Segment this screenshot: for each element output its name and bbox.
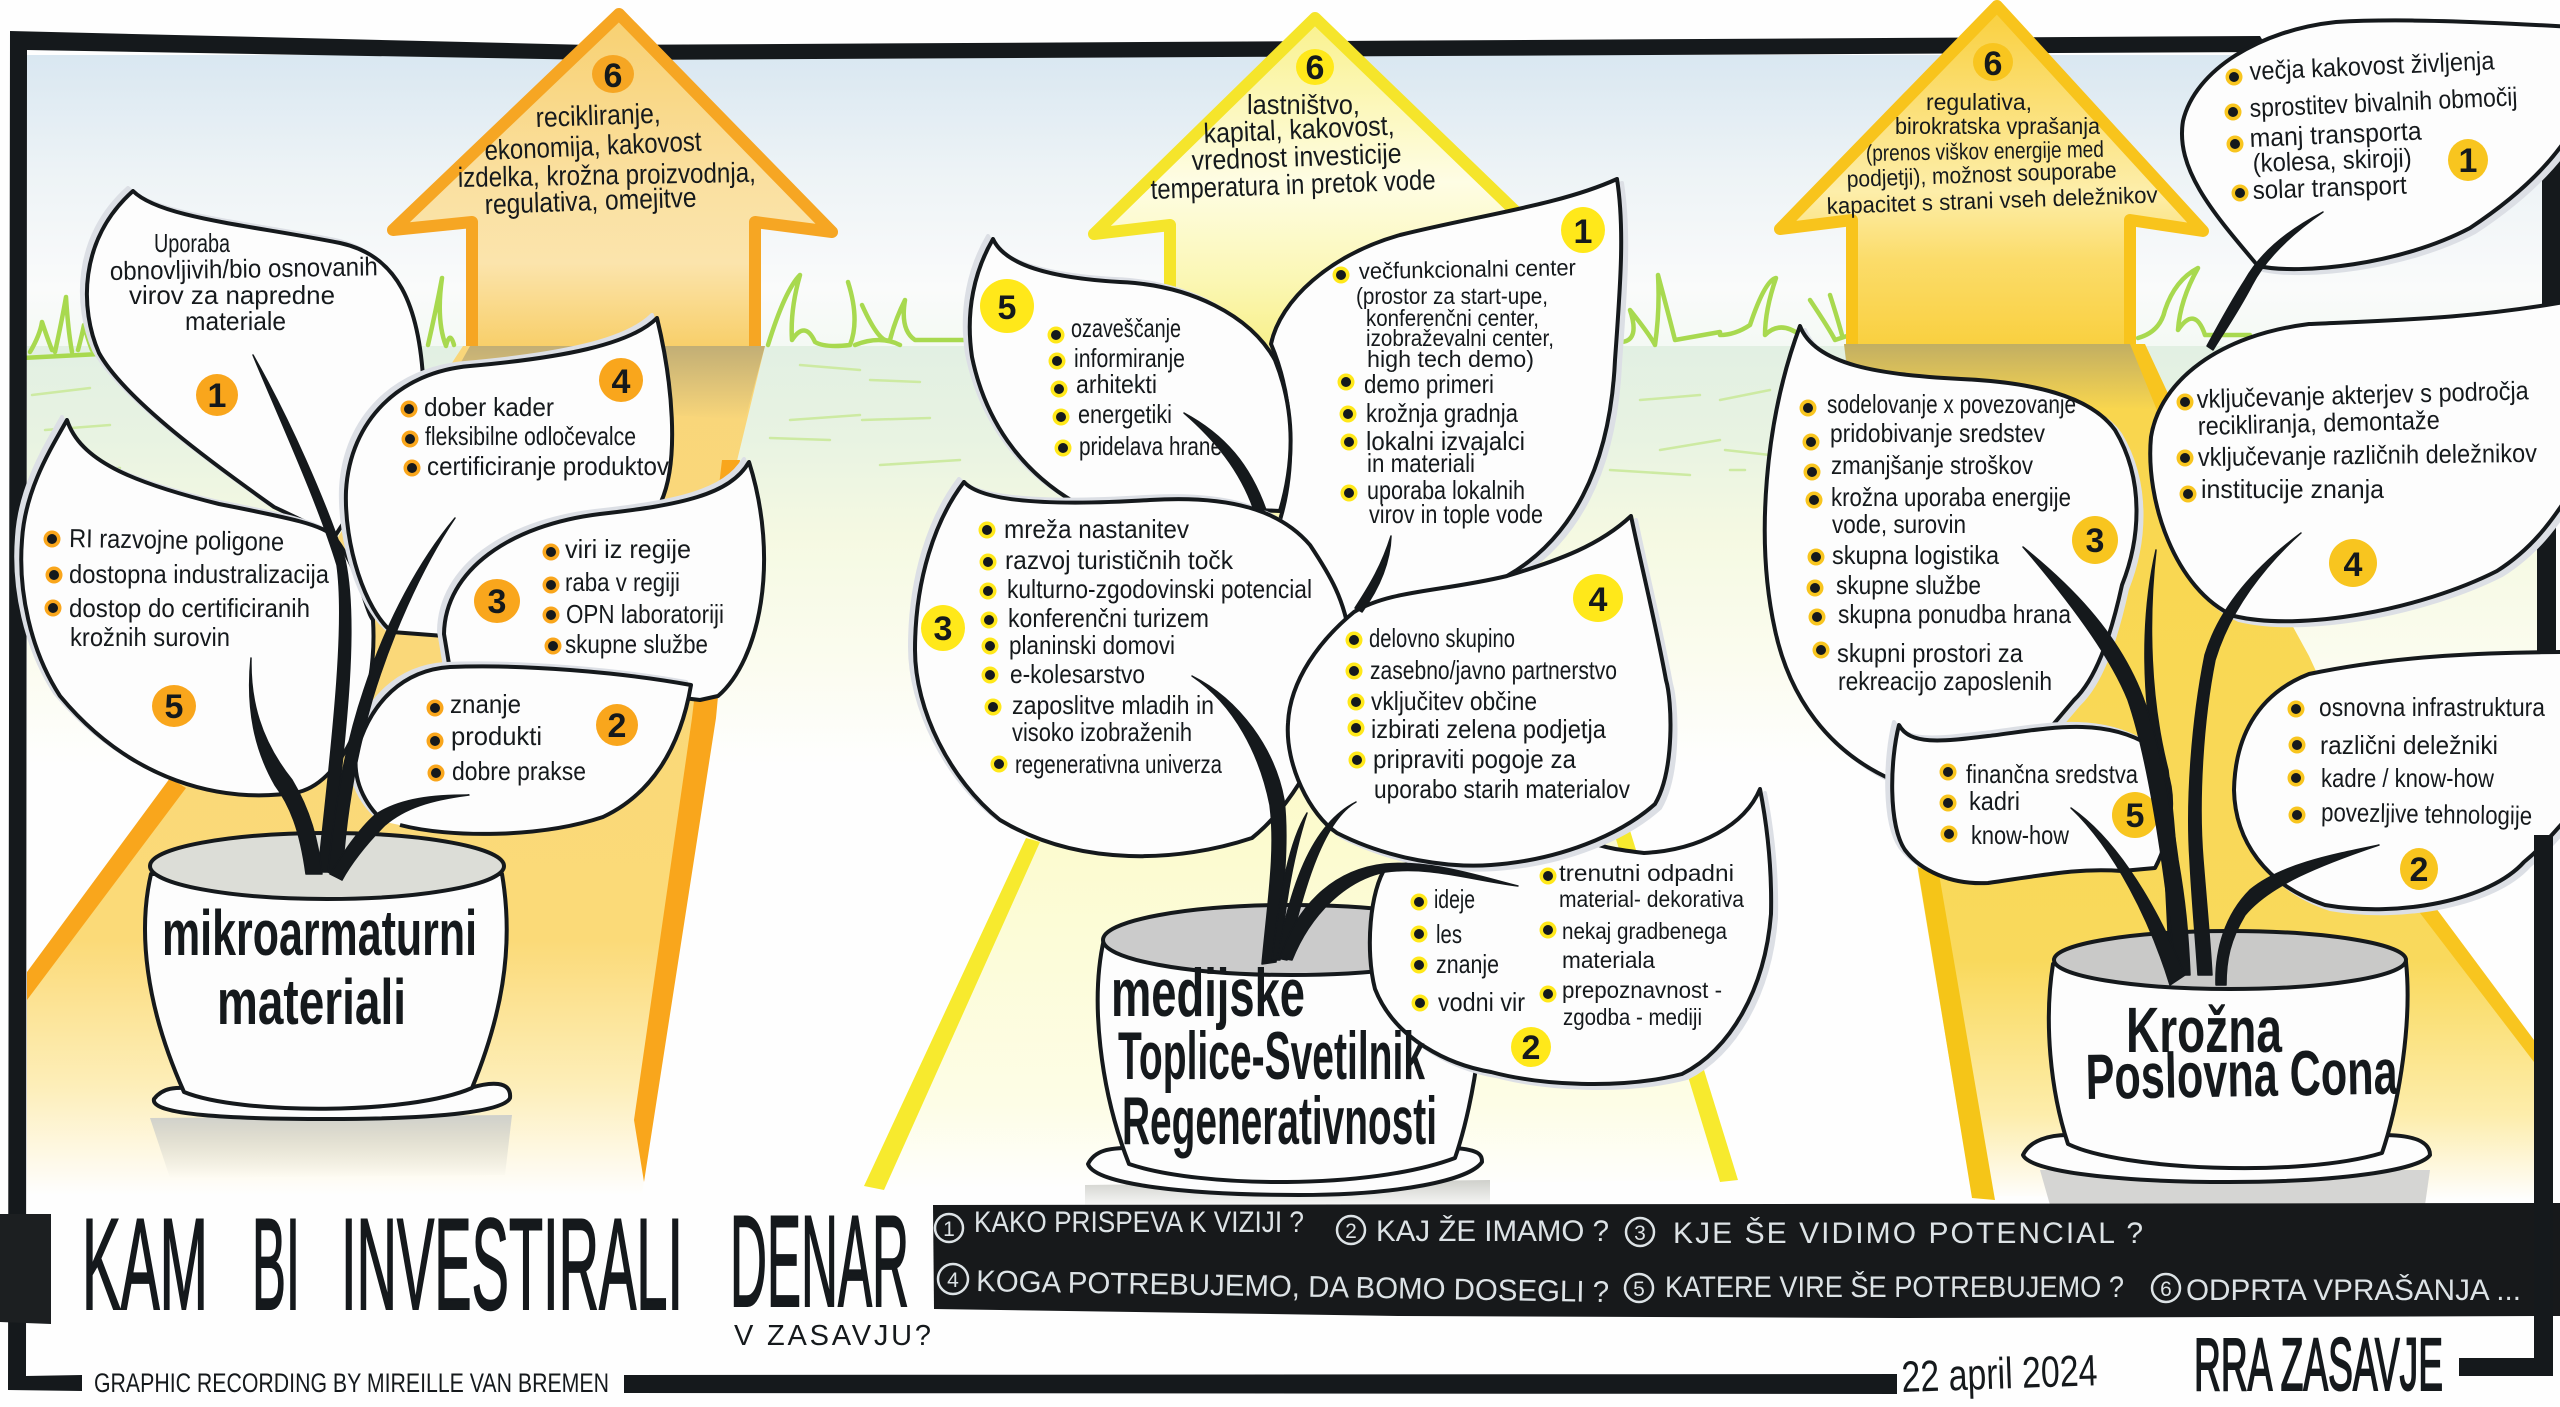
date: 22 april 2024	[1901, 1346, 2098, 1402]
arrow text	[1826, 89, 2158, 219]
leaf 1 text: Uporaba	[154, 228, 230, 258]
leaf 5 list	[1056, 313, 1222, 461]
frame: title bracket	[0, 1214, 51, 1324]
pot: mikroarmaturni materiali	[145, 833, 510, 1119]
leaf 4 list: uporabo starih materialov	[1374, 774, 1630, 804]
arrow 6 middle	[1094, 18, 1541, 346]
leaf 5 list: ozaveščanje	[1071, 313, 1181, 343]
arrow text: regulativa,	[1926, 89, 2032, 115]
text: DENAR	[730, 1188, 909, 1334]
leaf 3 list: skupne službe	[565, 629, 708, 659]
pot label: medijske	[1111, 955, 1305, 1031]
leaf 1 list: uporaba lokalnih	[1367, 475, 1525, 505]
leaf 3 list: OPN laboratoriji	[566, 599, 724, 629]
arrow text: kapacitet s strani vseh deležnikov	[1826, 181, 2158, 219]
leaf 3 list: skupna ponudba hrana	[1838, 599, 2071, 629]
leaf 2 lists: vodni vir	[1438, 987, 1525, 1017]
leaf 5	[1892, 725, 2171, 883]
badge 1: 1	[2459, 142, 2477, 180]
pot: krožna poslovna cona	[2023, 931, 2430, 1182]
badge 4: 4	[2344, 546, 2363, 584]
badge 5	[980, 279, 1034, 333]
stems	[2023, 212, 2379, 985]
badge 4	[599, 358, 643, 402]
leaf 3 list: pridobivanje sredstev	[1830, 418, 2045, 448]
badge 1: 1	[208, 377, 226, 415]
legend question 6: ODPRTA VPRAŠANJA ...	[2186, 1273, 2521, 1307]
arrow text	[458, 98, 756, 220]
badge 2: 2	[2410, 851, 2428, 889]
leaf 3 list: viri iz regije	[565, 534, 691, 564]
badge 5: 5	[998, 289, 1016, 327]
leaf 1 text: virov za napredne	[129, 280, 335, 310]
leaf 4 list: delovno skupino	[1369, 623, 1515, 653]
badge 1	[2448, 139, 2488, 181]
leaf 4 list: recikliranja, demontaže	[2197, 405, 2440, 441]
badge 5	[2112, 792, 2158, 838]
leaf 5 list: energetiki	[1078, 399, 1172, 429]
leaf 1 text	[110, 228, 378, 336]
leaf 5 list: dostopna industralizacija	[69, 559, 329, 589]
middle plant	[915, 179, 1771, 1210]
pot: krožna poslovna cona: Krožna	[2126, 994, 2282, 1066]
leaf 2 list: kadre / know-how	[2321, 763, 2494, 793]
number badge 6: 6	[1306, 49, 1324, 87]
leaf 3 list: zaposlitve mladih in	[1012, 690, 1214, 720]
pot: krožna poslovna cona: Poslovna Cona	[2085, 1036, 2398, 1113]
leaf 4 list: izbirati zelena podjetja	[1371, 714, 1606, 744]
badge 3	[921, 605, 965, 651]
arrow 6 right	[1780, 6, 2203, 344]
leaf 1 list: konferenčni center,	[1366, 305, 1539, 331]
stems	[250, 355, 469, 880]
leaf 1	[2182, 20, 2560, 269]
meadow wash	[27, 346, 2542, 766]
arrow text: (prenos viškov energije med	[1866, 136, 2104, 166]
badge 1: 1	[1574, 213, 1592, 251]
credit: GRAPHIC RECORDING BY MIREILLE VAN BREMEN	[94, 1368, 609, 1398]
arrow text: izdelka, krožna proizvodnja,	[458, 157, 756, 193]
leaf 4 list: vključevanje akterjev s področja	[2196, 375, 2530, 414]
leaf 3 list	[987, 514, 1312, 779]
leaf 5	[970, 239, 1291, 511]
badge 4	[2329, 539, 2377, 587]
leaf 2	[2234, 652, 2560, 909]
leaf 3 list: zmanjšanje stroškov	[1831, 450, 2033, 480]
badge 4: 4	[612, 363, 631, 401]
leaf 3 list: e-kolesarstvo	[1010, 659, 1145, 689]
leaf 3 list: visoko izobraženih	[1012, 717, 1192, 747]
leaf 3 list: sodelovanje x povezovanje	[1827, 389, 2076, 419]
pot: mikroarmaturni materiali: mikroarmaturni	[162, 897, 477, 969]
badge 2	[2400, 848, 2438, 890]
leaf 1 list: (prostor za start-upe,	[1356, 283, 1548, 309]
leaf 3 list: razvoj turističnih točk	[1005, 545, 1234, 575]
leaf 4 list	[2185, 375, 2537, 504]
leaf 4 list: vključitev občine	[1371, 686, 1537, 716]
leaf 3	[1765, 326, 2137, 777]
badge 2	[596, 704, 638, 746]
leaf 1 text: obnovljivih/bio osnovanih	[110, 251, 378, 286]
leaf 3 list: skupne službe	[1836, 570, 1981, 600]
legend question 3: KJE ŠE VIDIMO POTENCIAL ?	[1673, 1216, 2143, 1250]
leaf 4 list: institucije znanja	[2201, 474, 2385, 504]
number badge 6: 6	[1984, 45, 2002, 83]
leaf 3 list: planinski domovi	[1009, 630, 1175, 660]
title: KAM	[82, 1191, 208, 1337]
badge 3	[474, 579, 520, 623]
title: BI	[252, 1191, 300, 1337]
leaf 3	[444, 462, 764, 700]
right plant	[1765, 20, 2560, 1205]
leaf 2 lists	[1419, 860, 1744, 1030]
frame: right top segment	[2537, 130, 2560, 660]
pot shadow	[150, 1115, 512, 1178]
leaf 5 list: informiranje	[1074, 343, 1185, 373]
leaf 1 text: materiale	[185, 306, 286, 336]
number badge 6: 6	[604, 57, 622, 95]
badge 3: 3	[934, 610, 952, 648]
middle yellow road	[864, 346, 1738, 1190]
badge 5: 5	[165, 688, 183, 726]
leaf 1 list: in materiali	[1367, 448, 1475, 478]
leaf 1 list: lokalni izvajalci	[1366, 426, 1525, 456]
arrow text: lastništvo,	[1247, 89, 1360, 120]
leaf 2	[1370, 789, 1771, 1084]
leaf 1 list: demo primeri	[1364, 369, 1494, 399]
badge 2: 2	[1522, 1029, 1540, 1067]
legend band	[933, 1203, 2560, 1318]
badge 4: 4	[1589, 581, 1608, 619]
leaf 2 list: dobre prakse	[452, 756, 586, 786]
leaf 3 list: skupni prostori za	[1837, 638, 2023, 668]
leaf 2 lists: prepoznavnost -	[1562, 977, 1722, 1003]
leaf 2 lists: zgodba - mediji	[1563, 1004, 1702, 1030]
leaf 1 list: izobraževalni center,	[1366, 325, 1554, 351]
leaf 5 list: krožnih surovin	[70, 622, 230, 652]
leaf 5 list: arhitekti	[1076, 369, 1157, 399]
leaf 1 list: virov in tople vode	[1369, 499, 1543, 529]
leaf 1	[1271, 179, 1621, 640]
leaf 4 list: certificiranje produktov	[427, 451, 669, 481]
leaf 3 list: vode, surovin	[1832, 509, 1966, 539]
leaf 3 list	[1808, 389, 2076, 696]
leaf 1 list: krožnja gradnja	[1366, 398, 1518, 428]
arrow text: podjetji), možnost souporabe	[1846, 157, 2117, 192]
leaf 2 list: različni deležniki	[2320, 730, 2498, 760]
leaf 4	[1288, 516, 1670, 866]
leaf 5	[21, 420, 374, 795]
badge 2: 2	[608, 707, 626, 745]
leaf 1 list: večja kakovost življenja	[2249, 45, 2496, 86]
title	[82, 1188, 909, 1337]
badge 3	[2072, 516, 2118, 564]
legend question 4: KOGA POTREBUJEMO, DA BOMO DOSEGLI ?	[976, 1265, 1609, 1309]
leaf 1 list	[1341, 254, 1576, 529]
frame: right lower segment	[2459, 835, 2553, 1376]
leaf 1 list: manj transporta	[2249, 115, 2423, 153]
subtitle: V ZASAVJU?	[734, 1320, 931, 1352]
leaf 2 lists: nekaj gradbenega	[1562, 918, 1727, 944]
leaf 2 list: znanje	[450, 689, 521, 719]
leaf 4 list: dober kader	[424, 392, 554, 422]
arrow text: recikliranje,	[535, 98, 661, 133]
leaf 5 list: kadri	[1969, 786, 2020, 816]
leaf 5 list	[1948, 759, 2138, 850]
leaf 1 list: sprostitev bivalnih območij	[2249, 81, 2518, 123]
leaf 2 lists: les	[1436, 919, 1462, 949]
legend question 5: KATERE VIRE ŠE POTREBUJEMO ?	[1665, 1270, 2124, 1304]
badge 3: 3	[2086, 522, 2104, 560]
legend question 1: KAKO PRISPEVA K VIZIJI ?	[974, 1206, 1304, 1239]
arrow text: kapital, kakovost,	[1203, 110, 1395, 149]
leaf 2 lists: material- dekorativa	[1559, 886, 1744, 912]
arrow text: regulativa, omejitve	[484, 182, 697, 220]
leaf 2 list: produkti	[451, 721, 542, 751]
badge 5: 5	[2126, 797, 2144, 835]
legend question 4: 4	[947, 1269, 959, 1292]
leaf 4 list: pripraviti pogoje za	[1373, 744, 1577, 774]
badge 3: 3	[488, 583, 506, 621]
leaf 5 list: pridelava hrane	[1079, 431, 1222, 461]
arrow text: ekonomija, kakovost	[484, 126, 702, 166]
leaf 4	[346, 318, 672, 636]
leaf 1	[87, 191, 424, 536]
legend question 5: 5	[1633, 1278, 1645, 1301]
number badge 6	[1973, 43, 2013, 83]
leaf 5 list: RI razvojne poligone	[69, 523, 284, 557]
pot shadow	[1085, 1180, 1490, 1210]
leaf 2 list	[2296, 692, 2545, 831]
arrow text	[1150, 89, 1436, 205]
leaf 3 list: regenerativna univerza	[1015, 749, 1222, 779]
number badge 6	[1296, 49, 1334, 87]
leaf 1 list: solar transport	[2252, 170, 2408, 205]
leaf 1 list: (kolesa, skiroji)	[2252, 142, 2412, 178]
sky wash	[27, 55, 2542, 347]
title: INVESTIRALI	[341, 1191, 683, 1337]
leaf 4	[2150, 300, 2560, 621]
leaf 2 lists: ideje	[1434, 884, 1475, 914]
legend question 2: 2	[1345, 1220, 1357, 1243]
number badge 6	[592, 55, 634, 95]
pot label	[1111, 955, 1437, 1159]
grass and meadow strokes	[22, 268, 2250, 475]
badge 1	[196, 374, 238, 416]
pot: medijske toplice	[1088, 905, 1482, 1195]
pot label: Regenerativnosti	[1122, 1083, 1437, 1159]
leaf 3 list: mreža nastanitev	[1004, 514, 1189, 544]
leaf 3 list: konferenčni turizem	[1008, 603, 1209, 633]
leaf 2 list	[435, 689, 586, 786]
leaf 2 lists: znanje	[1436, 949, 1499, 979]
leaf 1 list: high tech demo)	[1367, 346, 1534, 372]
legend question 3: 3	[1634, 1222, 1646, 1245]
leaf 2 lists: materiala	[1562, 947, 1655, 973]
leaf 3 list: raba v regiji	[565, 567, 680, 597]
leaf 5 list	[52, 523, 329, 652]
leaf 4 list: zasebno/javno partnerstvo	[1370, 655, 1617, 685]
pot: mikroarmaturni materiali: materiali	[217, 966, 406, 1038]
leaf 3 list: skupna logistika	[1832, 540, 1999, 570]
stems	[1184, 413, 1518, 964]
left orange road	[27, 346, 765, 1195]
pot label: Toplice-Svetilnik	[1118, 1018, 1425, 1094]
leaf 3 list: rekreacijo zaposlenih	[1838, 666, 2052, 696]
frame: bottom line	[624, 1374, 1897, 1394]
badge 2	[1511, 1027, 1551, 1067]
legend question 1: 1	[943, 1218, 955, 1241]
leaf 4 list: fleksibilne odločevalce	[425, 421, 636, 451]
leaf 1 list	[2233, 45, 2518, 205]
arrow text: temperatura in pretok vode	[1150, 164, 1436, 205]
badge 1	[1561, 207, 1605, 253]
leaf 3 list	[551, 534, 724, 659]
leaf 4 list	[409, 392, 669, 481]
leaf 3	[915, 482, 1350, 856]
leaf 3 list: kulturno-zgodovinski potencial	[1007, 574, 1312, 604]
legend question 2: KAJ ŽE IMAMO ?	[1376, 1215, 1609, 1248]
leaf 2 lists: trenutni odpadni	[1559, 860, 1734, 886]
legend question 6: 6	[2160, 1278, 2172, 1301]
leaf 5 list: dostop do certificiranih	[69, 593, 310, 623]
arrow 6 left	[393, 14, 832, 346]
arrow text: birokratska vprašanja	[1895, 113, 2100, 139]
right gold road	[1844, 344, 2534, 1200]
left plant	[21, 191, 764, 1178]
leaf 5 list: know-how	[1971, 820, 2069, 850]
leaf 5 list: finančna sredstva	[1966, 759, 2138, 789]
arrow text: vrednost investicije	[1191, 138, 1402, 176]
leaf 2	[356, 666, 691, 834]
leaf 1 list: večfunkcionalni center	[1359, 254, 1576, 284]
leaf 4 list	[1354, 623, 1630, 804]
pot shadow	[2040, 1170, 2430, 1205]
badge 4	[1573, 574, 1623, 622]
leaf 3 list: krožna uporaba energije	[1831, 482, 2071, 512]
badge 5	[152, 685, 196, 727]
